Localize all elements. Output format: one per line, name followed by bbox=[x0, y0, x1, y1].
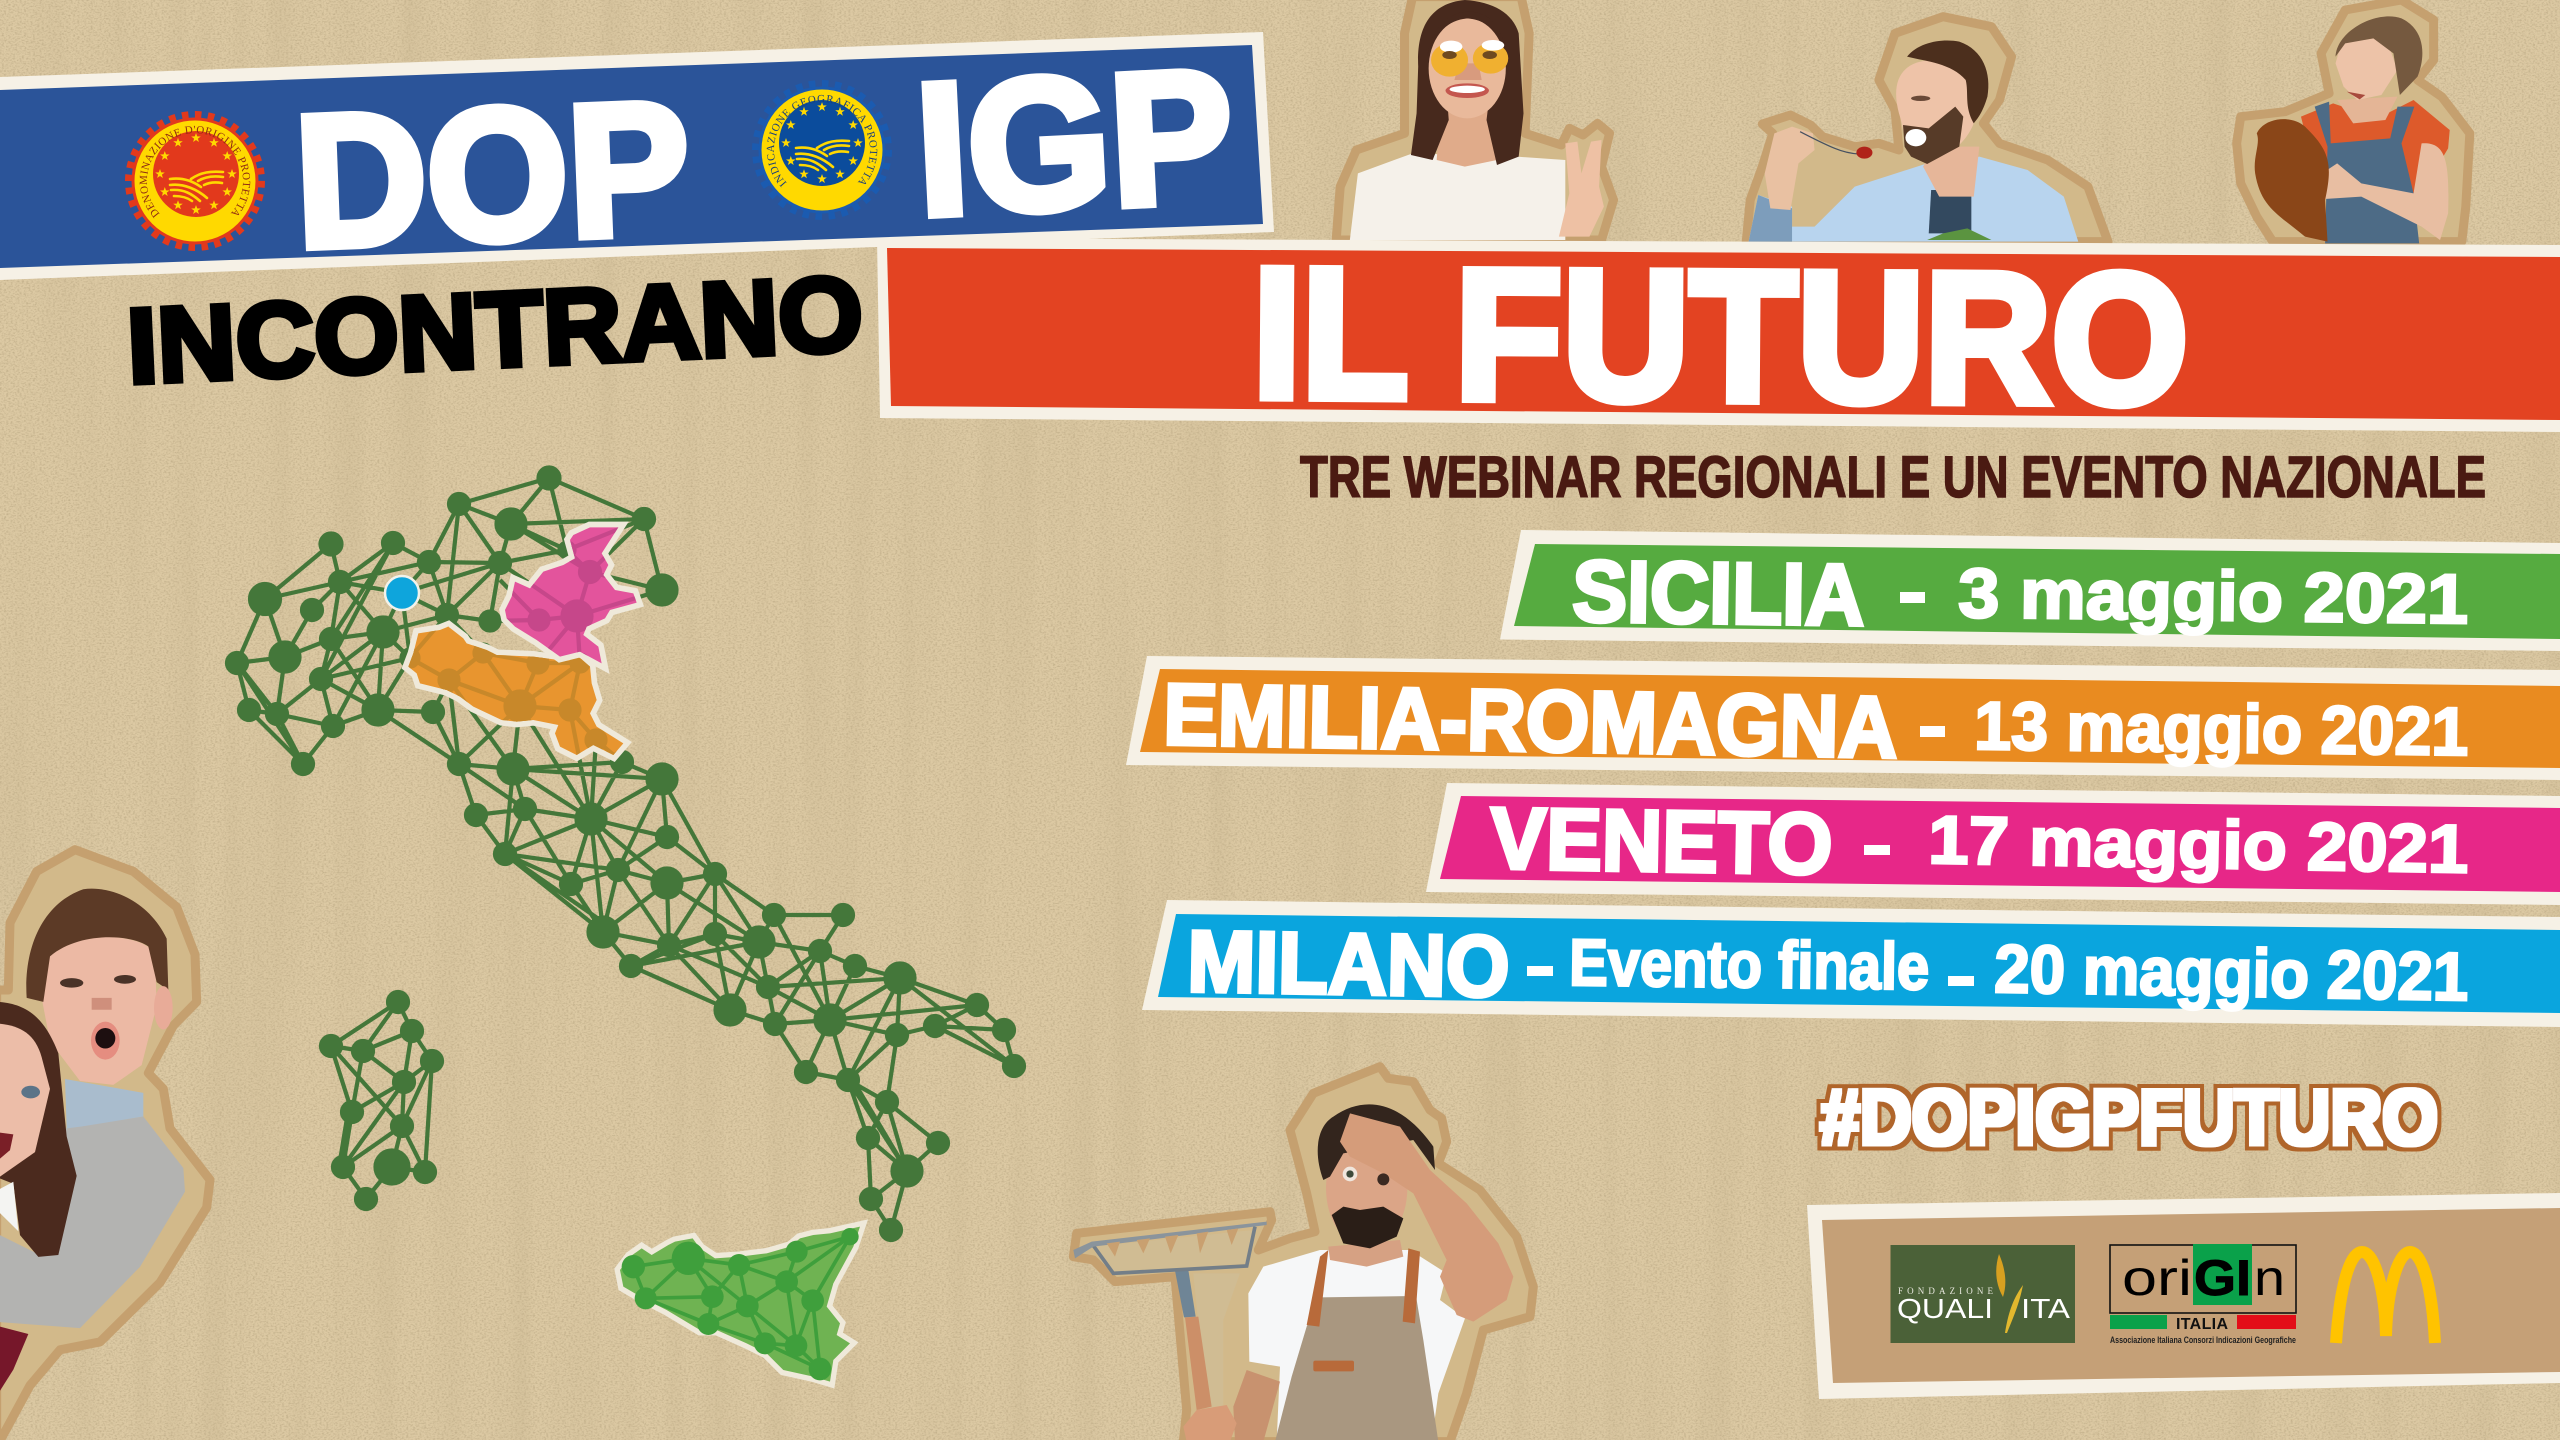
blue banner DOP IGP bbox=[0, 30, 1274, 287]
logo: Fondazione Qualivita bbox=[1890, 1245, 2075, 1343]
logo: oriGIn Italia: Associazione Italiana Consorzi Indicazioni Geografiche bbox=[2110, 1335, 2296, 1346]
heading: INCONTRANO: INCONTRANO bbox=[125, 255, 865, 406]
photo: woman with sunglasses bbox=[1336, 0, 1614, 240]
ribbon: Milano: MILANO bbox=[1187, 913, 1510, 1016]
ribbon: Milano: 20 maggio 2021 bbox=[1994, 931, 2469, 1015]
ribbon: Veneto: VENETO bbox=[1490, 790, 1833, 893]
heading: DOP: DOP bbox=[291, 62, 693, 287]
ribbon: Emilia-Romagna: EMILIA-ROMAGNA bbox=[1163, 666, 1898, 776]
logo: oriGIn Italia: n bbox=[2254, 1250, 2285, 1306]
region: Emilia-Romagna bbox=[402, 620, 632, 762]
logo: McDonald's arches bbox=[2336, 1252, 2435, 1343]
heading: IL FUTURO: IL FUTURO bbox=[1252, 230, 2189, 444]
logo: Fondazione Qualivita: ITA bbox=[2021, 1293, 2070, 1324]
logo: oriGIn Italia: ITALIA bbox=[2176, 1316, 2228, 1333]
photo: gardener holding rake bbox=[1073, 1067, 1533, 1440]
ribbon: Emilia-Romagna bbox=[1126, 656, 2560, 780]
ribbon: Milano bbox=[1142, 900, 2560, 1027]
ribbon: Veneto: 17 maggio 2021 bbox=[1928, 802, 2469, 887]
logo: oriGIn Italia: GI bbox=[2194, 1250, 2251, 1306]
seal: IGP: INDICAZIONE GEOGRAFICA PROTETTA bbox=[766, 94, 878, 188]
photo: two surprised children bbox=[0, 850, 210, 1440]
ribbon: Sicilia bbox=[1500, 530, 2560, 651]
region: Sicily bbox=[620, 1227, 860, 1382]
logo: oriGIn Italia: ori bbox=[2122, 1250, 2192, 1306]
seal: IGP bbox=[752, 80, 892, 220]
peninsula network of nodes bbox=[226, 466, 1026, 1242]
ribbon: Sicilia: SICILIA bbox=[1572, 543, 1865, 644]
ribbon: Sicilia: 3 maggio 2021 bbox=[1958, 554, 2469, 638]
ribbon: Veneto bbox=[1426, 783, 2560, 905]
ribbon: Milano: Evento finale bbox=[1569, 925, 1930, 1003]
marker: Milano bbox=[385, 576, 419, 610]
region: Veneto bbox=[499, 522, 644, 674]
Italy network map bbox=[226, 466, 1026, 1382]
sponsor panel bbox=[1807, 1193, 2560, 1399]
seal: DOP: DENOMINAZIONE D'ORIGINE PROTETTA bbox=[140, 126, 250, 218]
photo: man eating with fork bbox=[1746, 17, 2108, 242]
seal: DOP bbox=[125, 111, 265, 251]
logo: Fondazione Qualivita: QUALI bbox=[1897, 1293, 1993, 1324]
hashtag: #DOPIGPFUTURO bbox=[1820, 1073, 2438, 1161]
photo: woman holding hen bbox=[2237, 0, 2470, 243]
logo: oriGIn Italia bbox=[2110, 1244, 2296, 1346]
Sardinia network bbox=[320, 990, 444, 1210]
red banner IL FUTURO bbox=[877, 230, 2560, 444]
logo: Fondazione Qualivita: FONDAZIONE bbox=[1898, 1286, 1994, 1296]
ribbon: Emilia-Romagna: 13 maggio 2021 bbox=[1974, 688, 2469, 770]
heading: IGP: IGP bbox=[912, 30, 1238, 255]
